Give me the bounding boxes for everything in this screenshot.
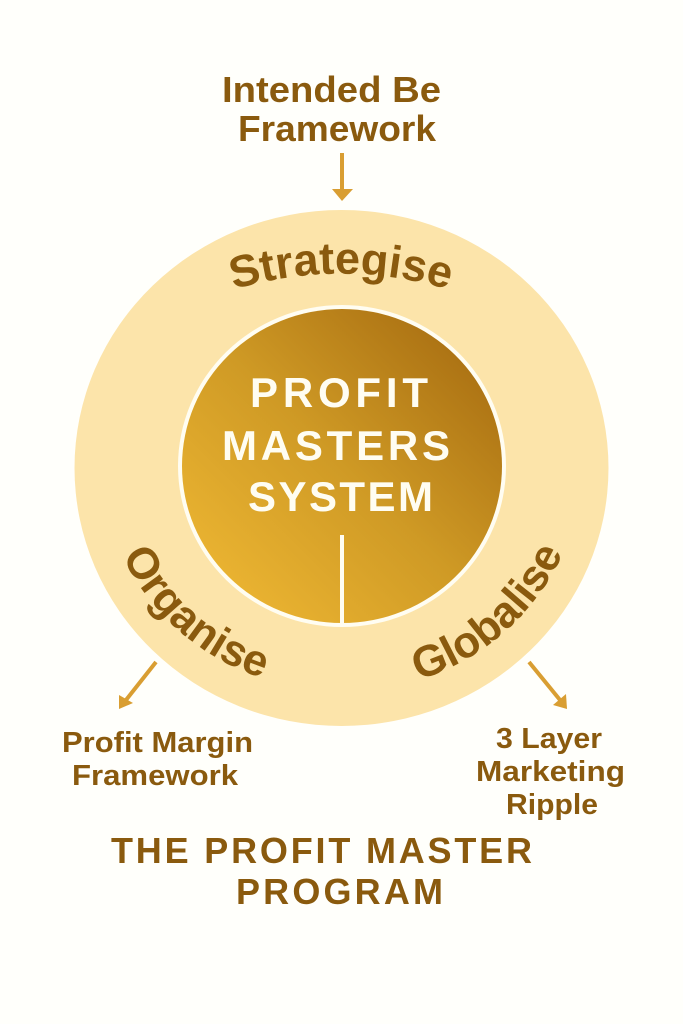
left label: Framework xyxy=(72,760,239,792)
right label: Marketing xyxy=(476,756,625,788)
arrow: left xyxy=(119,662,156,709)
top label xyxy=(222,69,441,149)
left label xyxy=(62,727,253,792)
right label xyxy=(476,723,625,821)
right label: 3 Layer xyxy=(496,723,602,755)
top label: Intended Be xyxy=(222,69,441,110)
center title: MASTERS xyxy=(222,422,450,469)
outer ring xyxy=(74,210,608,726)
footer title: PROGRAM xyxy=(236,871,443,912)
left label: Profit Margin xyxy=(62,727,253,759)
center divider xyxy=(340,535,344,624)
inner circle xyxy=(178,305,506,627)
arrow: top xyxy=(332,153,353,201)
footer title xyxy=(111,830,532,912)
arrow: right xyxy=(529,662,567,709)
footer title: THE PROFIT MASTER xyxy=(111,830,532,871)
right label: Ripple xyxy=(506,789,598,821)
top label: Framework xyxy=(238,108,437,149)
ring label: Globalise: Globalise xyxy=(413,547,560,676)
center title: PROFIT xyxy=(250,369,428,416)
ring label: Organise: Organise xyxy=(128,548,266,676)
center title xyxy=(222,369,450,520)
center title: SYSTEM xyxy=(248,473,433,520)
ring label: Strategise: Strategise xyxy=(230,244,451,288)
